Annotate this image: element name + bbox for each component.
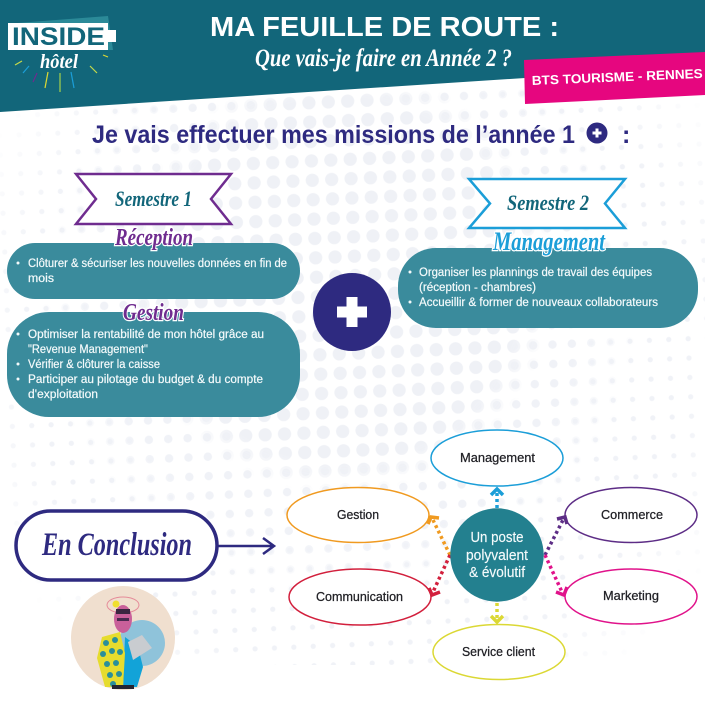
illustration: person reading: [71, 586, 175, 690]
center node: Un poste polyvalent et évolutif: Un poste: [470, 530, 524, 546]
node: Service client: [433, 624, 565, 680]
node: Service client: Service client: [462, 645, 536, 659]
center node: Un poste polyvalent et évolutif: polyvalent: [466, 548, 528, 564]
node: Commerce: [565, 488, 697, 542]
node: Marketing: [565, 569, 697, 624]
arrow: to Service client: [491, 603, 503, 622]
callout: En Conclusion: En Conclusion: [41, 527, 192, 563]
header banner: [0, 0, 705, 112]
icon: plus circle: [313, 273, 391, 351]
panel: Management: (réception - chambres): [419, 282, 536, 294]
panel: Gestion: Vérifier & clôturer la caisse: [28, 359, 160, 371]
logo: Inside hôtel: INSIDE: [12, 23, 105, 51]
panel: Management: [398, 227, 698, 328]
tag: BTS Tourisme Rennes: [524, 52, 705, 104]
panel: Gestion: Participer au pilotage du budget & du compte: [28, 374, 263, 386]
ribbon: Semestre 1: Semestre 1: [115, 186, 192, 211]
diagram: polyvalent post: [287, 430, 697, 680]
node: Communication: [289, 569, 431, 625]
tag: BTS Tourisme Rennes: BTS TOURISME - RENNES: [531, 66, 703, 88]
ribbon: Semestre 2: [469, 179, 625, 228]
callout: En Conclusion: [16, 511, 217, 580]
heading: :: [622, 121, 630, 149]
panel: Gestion: d'exploitation: [28, 389, 98, 401]
center node: Un poste polyvalent et évolutif: & évolutif: [469, 565, 526, 581]
panel: Management: Management: [492, 227, 606, 256]
node: Communication: Communication: [316, 590, 403, 604]
center node: Un poste polyvalent et évolutif: [450, 508, 544, 602]
panel: Gestion: Gestion: [123, 300, 184, 326]
panel: Gestion: "Revenue Management": [28, 344, 148, 356]
node: Commerce: Commerce: [601, 508, 663, 522]
arrow: to Gestion: [428, 517, 450, 555]
panel: Réception: mois: [28, 273, 54, 285]
panel: Management: Organiser les plannings de travail des équipes: [419, 267, 652, 279]
arrow: to Communication: [429, 555, 450, 595]
panel: Gestion: Optimiser la rentabilité de mon hôtel grâce au: [28, 329, 264, 341]
node: Management: Management: [460, 451, 536, 465]
node: Marketing: Marketing: [603, 589, 659, 603]
panel: Management: Accueillir & former de nouveaux collaborateurs: [419, 297, 658, 309]
arrow: conclusion to diagram: [218, 538, 274, 554]
node: Management: [431, 430, 563, 486]
node: Gestion: Gestion: [337, 508, 379, 522]
arrow: to Management: [491, 489, 503, 508]
logo: Inside hôtel: hôtel: [40, 51, 78, 73]
panel: Réception: Clôturer & sécuriser les nouvelles données en fin de: [28, 258, 287, 270]
ribbon: Semestre 1: [76, 174, 231, 224]
arrow: to Commerce: [545, 517, 567, 555]
title: MA FEUILLE DE ROUTE :: [210, 11, 559, 42]
heading: Je vais effectuer mes missions de l’année 1: [92, 121, 575, 149]
arrow: to Marketing: [545, 555, 567, 595]
panel: Réception: Réception: [114, 225, 193, 251]
node: Gestion: [287, 488, 429, 542]
panel: Réception: [7, 225, 300, 299]
subtitle: Que vais-je faire en Année 2 ?: [255, 45, 512, 72]
panel: Gestion: [7, 300, 300, 417]
logo: Inside hôtel: [8, 16, 116, 92]
ribbon: Semestre 2: Semestre 2: [507, 190, 589, 215]
